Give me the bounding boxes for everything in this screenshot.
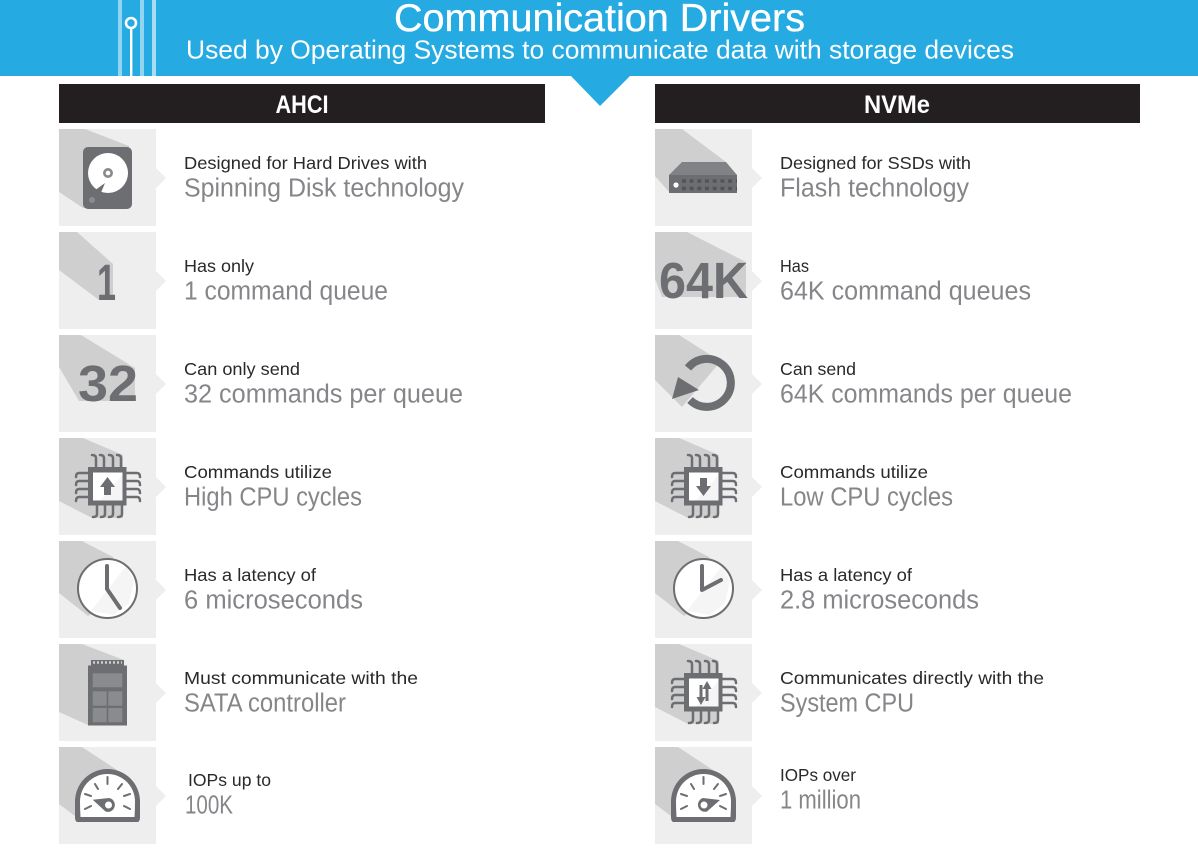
text: Can only send	[184, 359, 300, 379]
text	[184, 256, 388, 306]
icon: chip with down arrow	[655, 438, 762, 535]
row: SATA controller	[59, 644, 418, 741]
text: Commands utilize	[184, 462, 332, 482]
icon: clock	[59, 541, 166, 638]
row: commands per queue	[59, 335, 463, 432]
row: IOPs	[59, 747, 271, 844]
icon: clock	[655, 541, 762, 638]
icon: 64K	[655, 232, 762, 329]
text: IOPs up to	[188, 770, 271, 790]
panel: NVMe	[655, 84, 1140, 844]
icon: gauge high	[655, 747, 762, 844]
text: System CPU	[780, 690, 914, 718]
heading: AHCI	[59, 84, 545, 123]
row: commands per queue	[655, 335, 1072, 432]
icon: refresh arrow	[655, 335, 762, 432]
text	[184, 462, 362, 512]
text: Has a latency of	[184, 565, 316, 585]
text: Has only	[184, 256, 254, 276]
header banner	[0, 0, 1198, 106]
row: spinning disk	[59, 129, 464, 226]
row: IOPs	[655, 747, 861, 844]
icon: chip with two-way arrows	[655, 644, 762, 741]
text	[780, 765, 861, 814]
icon: number 32: 32	[78, 355, 138, 412]
icon: 64K: 64K	[659, 252, 748, 309]
heading: AHCI: AHCI	[276, 91, 328, 119]
row: queues	[655, 232, 1031, 329]
text: Communicates directly with the	[780, 668, 1044, 688]
text: Designed for Hard Drives with	[184, 153, 427, 173]
text: Must communicate with the	[184, 668, 418, 688]
icon: chip with up arrow	[59, 438, 166, 535]
row: latency	[655, 541, 979, 638]
circuit line decoration icon	[118, 0, 156, 76]
text	[185, 770, 271, 820]
text: 1 million	[780, 786, 861, 814]
text: 100K	[185, 792, 233, 820]
icon: number 1	[59, 232, 166, 329]
text	[184, 153, 464, 202]
text: Low CPU cycles	[780, 484, 953, 512]
text	[184, 668, 418, 718]
row: latency	[59, 541, 363, 638]
text: Has a latency of	[780, 565, 912, 585]
text: SATA controller	[184, 690, 346, 718]
text: Can send	[780, 359, 856, 379]
icon: SATA controller card	[59, 644, 166, 741]
text: High CPU cycles	[184, 484, 362, 512]
text: Spinning Disk technology	[184, 174, 464, 202]
text: 1 command queue	[184, 278, 388, 306]
icon: number 1: 1	[97, 254, 116, 311]
text: Has	[780, 256, 809, 276]
text: Flash technology	[780, 174, 969, 202]
text: 32 commands per queue	[184, 380, 463, 408]
text	[780, 462, 953, 512]
text	[184, 359, 463, 408]
row: high CPU	[59, 438, 362, 535]
row: low CPU	[655, 438, 953, 535]
heading: NVMe: NVMe	[864, 91, 930, 119]
icon: gauge low	[59, 747, 166, 844]
row: command queue	[59, 232, 388, 329]
icon: number 32	[59, 335, 166, 432]
text: 2.8 microseconds	[780, 586, 979, 614]
text: 64K commands per queue	[780, 380, 1072, 408]
text: Designed for SSDs with	[780, 153, 971, 173]
text	[780, 256, 1031, 306]
row: system CPU	[655, 644, 1044, 741]
panel: AHCI	[59, 84, 545, 844]
heading: NVMe	[655, 84, 1140, 123]
text: IOPs over	[780, 765, 856, 785]
icon: SSD box	[655, 129, 762, 226]
row: flash	[655, 129, 971, 226]
text	[780, 565, 979, 614]
subtitle: Used by Operating Systems to communicate data with storage devices	[186, 34, 1014, 64]
icon: hard drive	[59, 129, 166, 226]
text	[780, 153, 971, 202]
text	[780, 359, 1072, 408]
text: Commands utilize	[780, 462, 928, 482]
text: 64K command queues	[780, 278, 1031, 306]
text	[184, 565, 363, 614]
text: 6 microseconds	[184, 586, 363, 614]
text	[780, 668, 1044, 718]
